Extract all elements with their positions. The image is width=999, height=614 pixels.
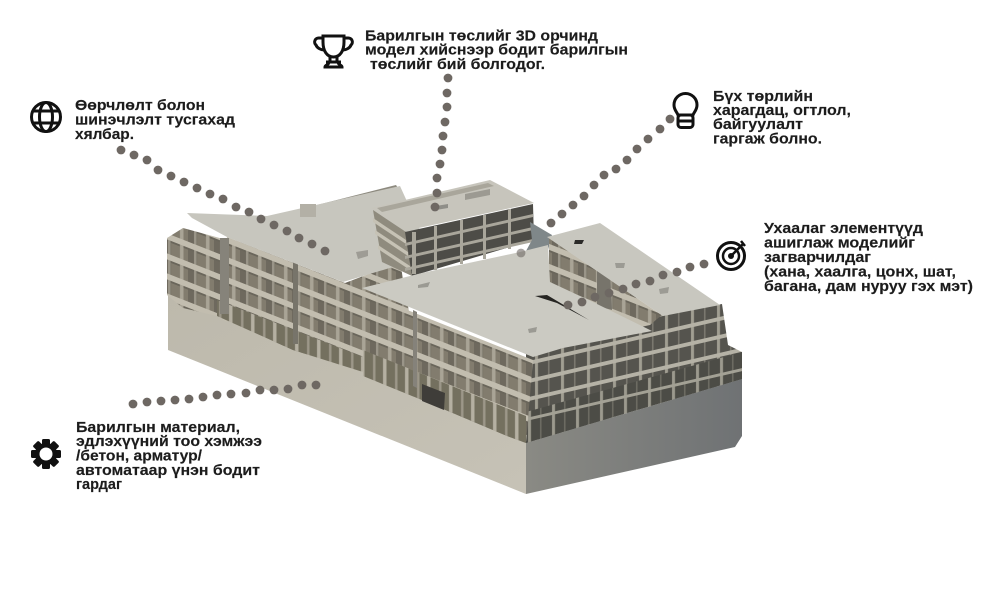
text: quantities: гардаг [76,476,122,493]
text: quantities: автоматаар үнэн бодит [76,462,260,479]
dotted leader: light bulb [517,115,674,257]
text: easy changes: Өөрчлөлт болон [75,97,205,114]
text: easy changes [75,97,235,143]
back block [371,180,534,276]
text: easy changes: шинэчлэлт тусгахад [75,112,235,128]
dotted leader: target [564,260,708,309]
dotted leader: globe [117,146,329,255]
text: 3D model: модел хийснээр бодит барилгын [365,42,628,58]
blue shadow gap [520,222,552,262]
text: smart elements [764,220,973,295]
text: 3D model [365,28,628,73]
text: easy changes: хялбар. [75,126,134,143]
text: drawings: Бүх төрлийн [713,88,813,105]
text: drawings: харагдац, огтлол, [713,102,851,119]
text: smart elements: (хана, хаалга, цонх, шат, [764,264,956,280]
text: drawings [713,88,851,148]
icon: gear [31,439,61,469]
icon: target [718,241,745,270]
left wing [167,186,420,372]
main block [362,245,652,443]
text: smart elements: Ухаалаг элементүүд [764,220,923,237]
icon: light bulb [674,94,697,128]
text: quantities [76,419,262,493]
text: 3D model: Барилгын төслийг 3D орчинд [365,28,598,44]
text: smart elements: загварчилдаг [764,249,871,266]
text: drawings: байгуулалт [713,116,803,133]
right wing [526,223,742,443]
text: drawings: гаргаж болно. [713,130,822,148]
back parapet wall [270,185,400,223]
text: quantities: эдлэхүүний тоо хэмжээ [76,433,262,450]
building model [167,180,742,494]
text: 3D model: төслийг бий болгодог. [370,56,545,73]
text: smart elements: багана, дам нуруу гэх мэт) [764,278,973,295]
icon: globe [32,102,60,132]
dotted leader: gear [129,381,320,408]
text: smart elements: ашиглаж моделийг [764,234,915,252]
icon: trophy [315,36,352,67]
concrete base [168,293,742,494]
text: quantities: /бетон, арматур/ [76,448,203,464]
text: quantities: Барилгын материал, [76,419,240,436]
dotted leader: trophy [431,74,452,211]
